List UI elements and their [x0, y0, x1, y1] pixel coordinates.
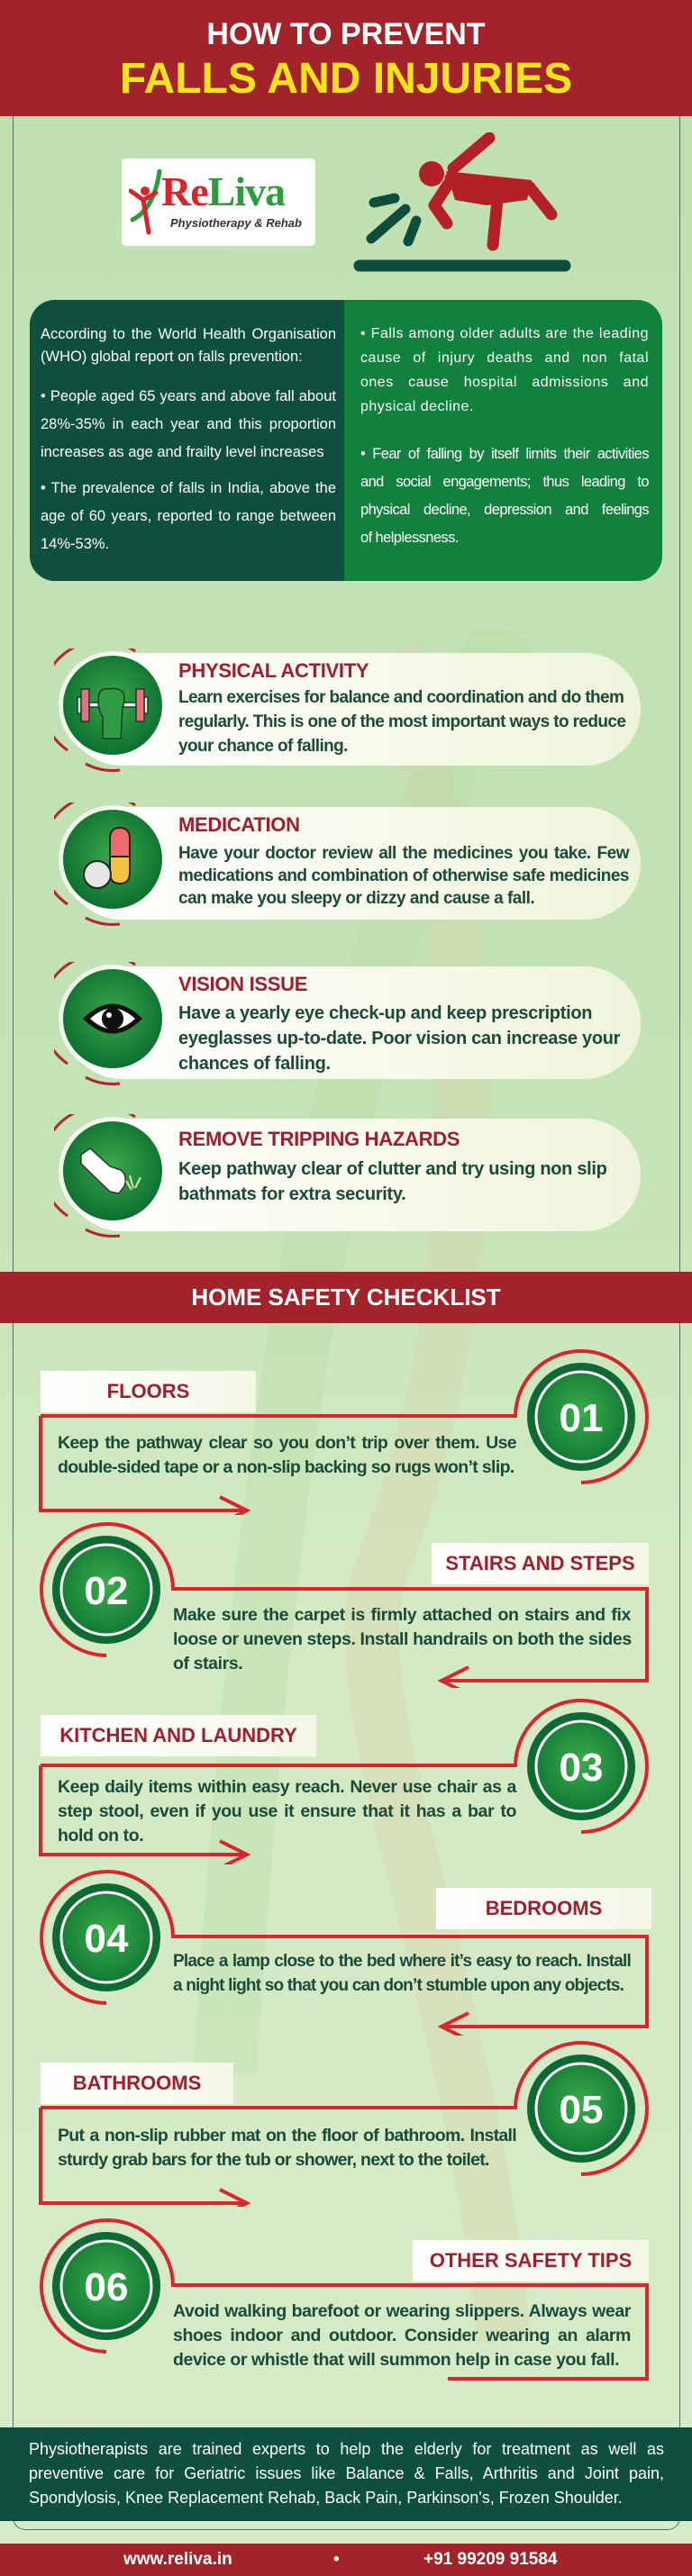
- label: FLOORS: [107, 1380, 189, 1402]
- label: [41, 1715, 316, 1756]
- label: [413, 2240, 649, 2281]
- right column: physical decline, depression and feelings: [360, 502, 649, 518]
- text: shoes indoor and outdoor. Consider wearing an alarm: [173, 2326, 631, 2345]
- left column: • The prevalence of falls in India, above the: [41, 480, 336, 496]
- body text: your chance of falling.: [178, 737, 348, 756]
- text: Make sure the carpet is firmly attached on stairs and fix: [173, 1605, 631, 1625]
- footer note: preventive care for Geriatric issues like Balance & Falls, Arthritis and Joint pain,: [29, 2464, 664, 2482]
- text: [58, 1433, 516, 1477]
- section heading: home safety checklist: [0, 1272, 692, 1323]
- text: [173, 1952, 631, 1995]
- card: physical activity: [54, 649, 641, 772]
- text: device or whistle that will summon help in case you fall.: [173, 2350, 619, 2370]
- body text: Keep pathway clear of clutter and try using non slip: [178, 1159, 607, 1179]
- label: [41, 2063, 233, 2104]
- right column: physical decline.: [360, 399, 474, 414]
- checklist item 01: floors: 01: [560, 1396, 603, 1440]
- text: step stool, even if you use it ensure that it has a bar to: [58, 1801, 516, 1821]
- footer note: Physiotherapists are trained experts to help the elderly for treatment as well as: [29, 2440, 664, 2458]
- left column: [30, 300, 344, 581]
- text: of stairs.: [173, 1654, 242, 1673]
- left column: According to the World Health Organisation: [41, 326, 336, 342]
- label: KITCHEN AND LAUNDRY: [59, 1724, 297, 1746]
- label: [432, 1543, 649, 1584]
- right column: cause of injury deaths and non fatal: [360, 350, 649, 366]
- header banner: [0, 0, 692, 116]
- body text: eyeglasses up-to-date. Poor vision can increase your: [178, 1029, 620, 1048]
- body text: Have your doctor review all the medicines you take. Few: [178, 844, 629, 863]
- checklist item 04: bedrooms: [40, 1870, 651, 2036]
- text: sturdy grab bars for the tub or shower, next to the toilet.: [58, 2150, 489, 2170]
- text: [173, 1605, 632, 1673]
- right column: and social engagements; thus leading to: [360, 474, 649, 490]
- card: remove tripping hazards: [54, 1114, 641, 1238]
- text: [58, 1777, 517, 1846]
- left column: age of 60 years, reported to range between: [41, 508, 336, 524]
- text: [58, 2126, 516, 2170]
- label: [41, 1371, 256, 1412]
- logo: ReLiva: [161, 168, 285, 214]
- label: [436, 1888, 651, 1929]
- left column: 14%-53%.: [41, 536, 109, 552]
- label: STAIRS AND STEPS: [445, 1552, 635, 1574]
- left column: 28%-35% in each year and this proportion: [41, 416, 336, 432]
- heading: PHYSICAL ACTIVITY: [178, 659, 369, 682]
- icon: falling person: [353, 132, 571, 272]
- body text: Have a yearly eye check-up and keep prescription: [178, 1003, 592, 1023]
- checklist item 06: other safety tips: [40, 2218, 649, 2381]
- text: [173, 2301, 631, 2370]
- right column: [360, 326, 649, 546]
- section heading: home safety checklist: HOME SAFETY CHECKLIST: [191, 1283, 501, 1311]
- heading: REMOVE TRIPPING HAZARDS: [178, 1128, 460, 1150]
- title line 1: HOW TO PREVENT: [206, 17, 486, 51]
- right column: • Falls among older adults are the leading: [360, 326, 649, 341]
- contact bar: [0, 2544, 692, 2576]
- checklist item 02: stairs and steps: [40, 1522, 649, 1688]
- left column: increases as age and frailty level increases: [41, 444, 324, 460]
- checklist item 02: stairs and steps: 02: [85, 1569, 128, 1613]
- text: Put a non-slip rubber mat on the floor of bathroom. Install: [58, 2126, 516, 2145]
- text: loose or uneven steps. Install handrails on both the sides: [173, 1629, 632, 1649]
- logo: Physiotherapy & Rehab: [170, 216, 302, 230]
- checklist item 05: bathrooms: [39, 2041, 649, 2207]
- text: Place a lamp close to the bed where it’s easy to reach. Install: [173, 1952, 631, 1971]
- contact bar: +91 99209 91584: [423, 2550, 557, 2569]
- label: BATHROOMS: [73, 2072, 201, 2094]
- checklist item 03: kitchen and laundry: [39, 1699, 649, 1864]
- contact bar: •: [333, 2550, 340, 2569]
- background decorative swoosh: [195, 921, 531, 2345]
- heading: MEDICATION: [178, 813, 300, 836]
- body text: Learn exercises for balance and coordination and do them: [178, 688, 624, 707]
- left column: (WHO) global report on falls prevention:: [41, 349, 303, 365]
- body text: regularly. This is one of the most important ways to reduce: [178, 712, 625, 731]
- checklist item 04: bedrooms: 04: [85, 1917, 129, 1961]
- body text: bathmats for extra security.: [178, 1184, 405, 1204]
- text: Keep daily items within easy reach. Never use chair as a: [58, 1777, 516, 1797]
- logo: [122, 159, 315, 246]
- left column: • People aged 65 years and above fall about: [41, 388, 336, 404]
- text: a night light so that you can don’t stumble upon any objects.: [173, 1976, 624, 1995]
- text: double-sided tape or a non-slip backing so rugs won’t slip.: [58, 1457, 514, 1477]
- label: BEDROOMS: [486, 1897, 602, 1919]
- body text: [178, 688, 625, 756]
- footer note: [0, 2427, 692, 2521]
- card: medication: [54, 803, 641, 926]
- body text: [178, 844, 629, 908]
- body text: [178, 1159, 607, 1204]
- text: Avoid walking barefoot or wearing slippers. Always wear: [173, 2301, 631, 2321]
- checklist item 01: floors: [39, 1349, 649, 1515]
- body text: can make you sleepy or dizzy and cause a fall.: [178, 889, 534, 908]
- panel: WHO statistics: [30, 300, 662, 581]
- right column: • Fear of falling by itself limits their activities: [360, 446, 649, 462]
- body text: medications and combination of otherwise safe medicines: [178, 866, 629, 885]
- title line 2: FALLS AND INJURIES: [120, 55, 572, 103]
- checklist item 06: other safety tips: 06: [85, 2265, 128, 2309]
- body text: [178, 1003, 620, 1074]
- text: Keep the pathway clear so you don’t trip over them. Use: [58, 1433, 516, 1453]
- body text: chances of falling.: [178, 1054, 331, 1074]
- heading: VISION ISSUE: [178, 973, 307, 995]
- checklist item 05: bathrooms: 05: [560, 2088, 603, 2132]
- text: hold on to.: [58, 1826, 143, 1846]
- label: OTHER SAFETY TIPS: [430, 2249, 632, 2272]
- card: vision issue: [54, 962, 641, 1085]
- right column: of helplessness.: [360, 530, 459, 546]
- contact bar: www.reliva.in: [123, 2550, 232, 2569]
- right column: ones cause hospital admissions and: [360, 375, 649, 390]
- checklist item 03: kitchen and laundry: 03: [560, 1746, 603, 1790]
- footer note: Spondylosis, Knee Replacement Rehab, Back Pain, Parkinson's, Frozen Shoulder.: [29, 2489, 623, 2507]
